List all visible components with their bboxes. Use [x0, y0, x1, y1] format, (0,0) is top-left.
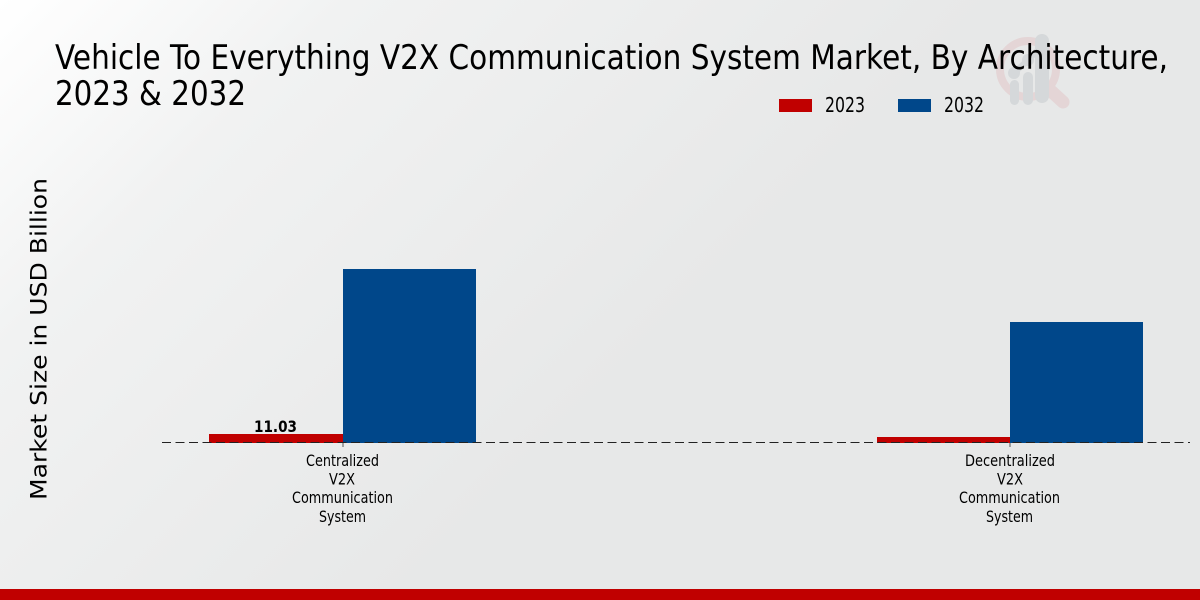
category label: Decentralized: Decentralized	[965, 451, 1055, 470]
category label: Decentralized: System	[986, 507, 1033, 526]
legend item: 2023	[779, 93, 865, 117]
category label: Centralized	[292, 451, 393, 526]
bar: Centralized 2023	[209, 434, 343, 443]
value label: 11.03: 11.03	[254, 417, 297, 436]
category label: Centralized: V2X	[329, 470, 355, 488]
legend item: 2032: 2032	[944, 93, 984, 117]
title: 2023 & 2032	[55, 74, 246, 114]
legend item: 2032	[898, 93, 984, 117]
bar chart	[162, 269, 1190, 526]
bar: Decentralized 2032	[1010, 322, 1143, 443]
footer bar	[0, 589, 1200, 600]
category label: Decentralized: V2X	[997, 470, 1023, 488]
y axis label: Market Size in USD Billion	[26, 178, 52, 500]
title	[55, 38, 1168, 114]
category label: Centralized: System	[319, 507, 366, 526]
legend item: 2023: 2023	[825, 93, 865, 117]
category label: Centralized: Centralized	[306, 451, 379, 470]
bar: Decentralized 2023	[877, 437, 1010, 443]
legend	[779, 93, 984, 117]
category label: Decentralized: Communication	[959, 488, 1060, 507]
bar: Centralized 2032	[343, 269, 476, 443]
icon: watermark logo	[1000, 34, 1063, 105]
category label: Centralized: Communication	[292, 488, 393, 507]
category label: Decentralized	[959, 451, 1060, 526]
